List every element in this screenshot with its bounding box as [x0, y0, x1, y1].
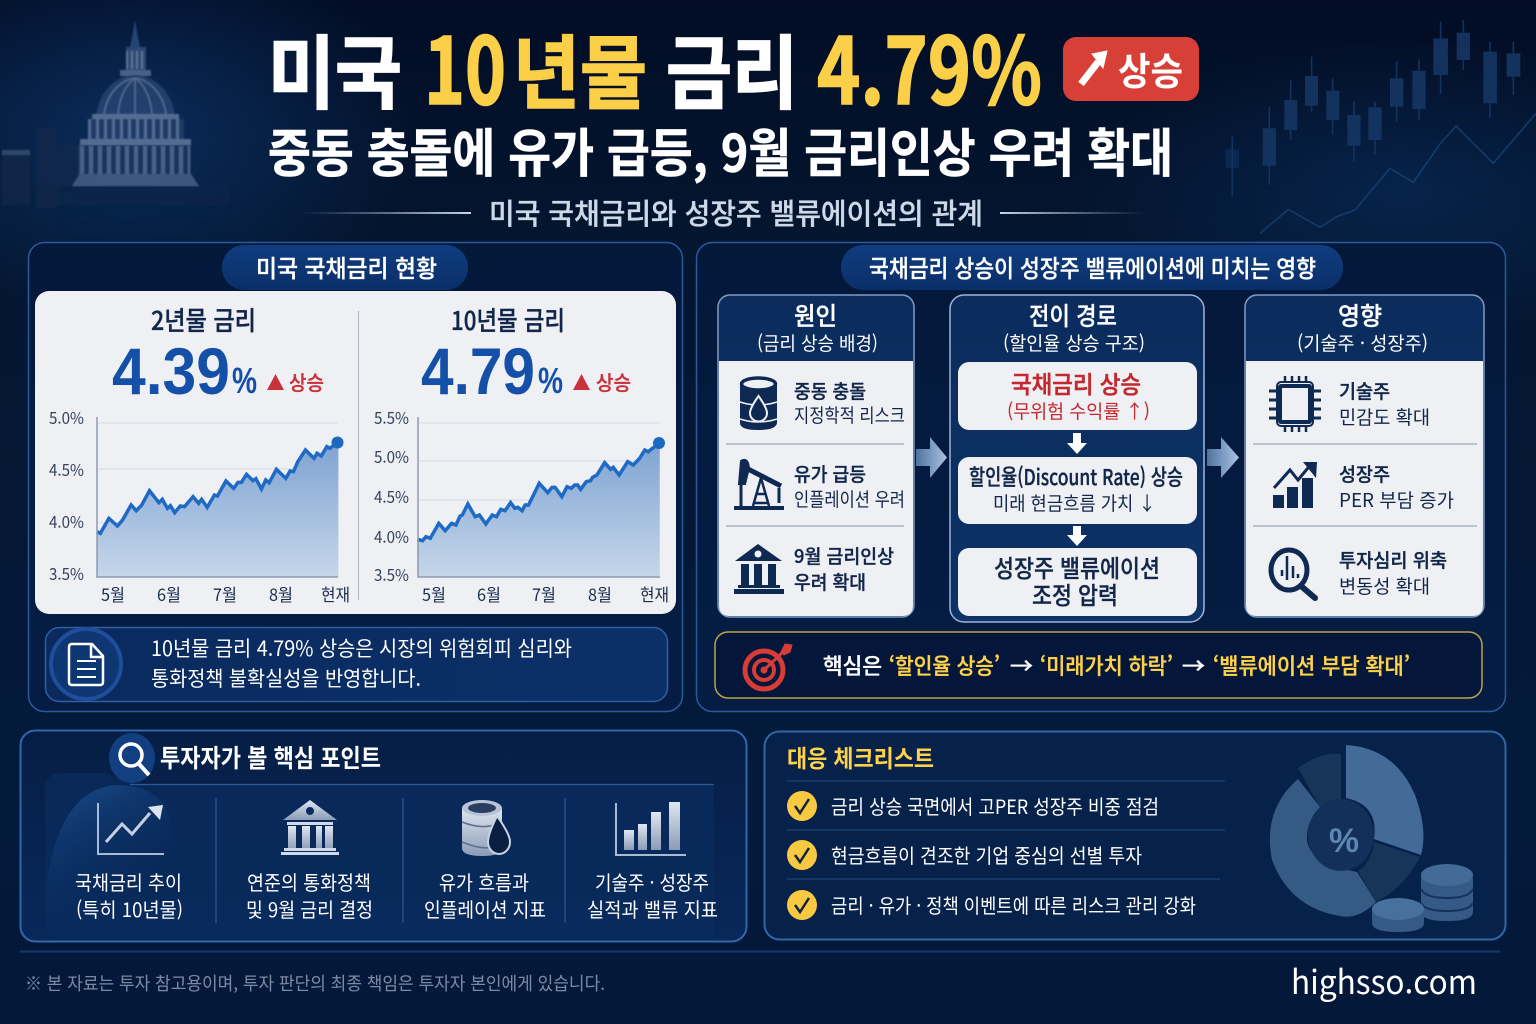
- arrow: down: [1067, 433, 1087, 454]
- checklist item 1: 금리 상승 국면에서 고PER 성장주 비중 점검: [831, 791, 1159, 820]
- icon: magnifier: [1271, 550, 1315, 598]
- chart: 2-year yield: 3.5%: [49, 561, 84, 585]
- box: discount rate: 할인율(Discount Rate) 상승: [969, 460, 1183, 492]
- column: impact: [1245, 295, 1484, 617]
- point: oil and inflation: [424, 800, 546, 923]
- chart: 2-year yield: 6월: [157, 581, 181, 606]
- panel: key points for investors: [20, 730, 746, 942]
- chart: 10-year yield: 5월: [422, 581, 446, 606]
- chart: 2-year yield: 2년물 금리: [151, 301, 256, 338]
- icon: oil barrel: [740, 378, 777, 430]
- chart: 2-year yield: 5월: [101, 581, 125, 606]
- point: tech and growth earnings: [587, 802, 718, 923]
- title: 10: [424, 0, 506, 131]
- box: valuation pressure: 조정 압력: [1032, 576, 1118, 611]
- chart: 2-year yield: 8월: [269, 581, 293, 606]
- box: valuation pressure: [958, 548, 1197, 616]
- column: impact: 민감도 확대: [1339, 403, 1430, 430]
- callout: 10-year note: [46, 628, 668, 702]
- chart: 2-year yield: 4.5%: [49, 457, 84, 481]
- column: causes: 유가 급등: [794, 460, 866, 487]
- callout: key takeaway: ‘밸류에이션 부담 확대’: [1213, 649, 1410, 681]
- box: yield rise: (무위험 수익률 ↑): [1007, 397, 1150, 424]
- point: yield trend: [75, 803, 183, 923]
- title: 년물: [513, 10, 647, 126]
- column: causes: 9월 금리인상: [794, 542, 894, 569]
- arrow: causes to path: [916, 437, 947, 478]
- point: tech and growth earnings: 실적과 밸류 지표: [587, 894, 718, 923]
- chart: 10-year yield: 8월: [588, 581, 612, 606]
- chart: 10-year yield: 상승: [596, 367, 631, 396]
- footer divider: [20, 950, 1500, 952]
- panel heading: [222, 245, 468, 290]
- icon: document: [69, 644, 103, 685]
- column: causes: 중동 충돌: [794, 377, 866, 404]
- callout: 10-year note: 통화정책 불확실성을 반영합니다.: [151, 663, 421, 693]
- panel: impact on growth stock valuation: [696, 242, 1506, 712]
- chart: 10-year yield: 3.5%: [374, 562, 409, 586]
- column: causes: 인플레이션 우려: [794, 485, 905, 512]
- box: yield rise: 국채금리 상승: [1011, 365, 1141, 400]
- point: yield trend: (특히 10년물): [76, 894, 183, 923]
- point: oil and inflation: 유가 흐름과: [439, 867, 529, 896]
- disclaimer: ※ 본 자료는 투자 참고용이며, 투자 판단의 최종 책임은 투자자 본인에게 있습니다.: [25, 970, 605, 996]
- yield card: [35, 291, 676, 614]
- section subtitle: 미국 국채금리와 성장주 밸류에이션의 관계: [489, 191, 983, 233]
- chart: 10-year yield: 현재: [640, 581, 669, 606]
- column: causes: 원인: [794, 297, 837, 333]
- chart: 2-year yield: 4.0%: [49, 509, 84, 533]
- panel heading: 미국 국채금리 현황: [256, 249, 437, 284]
- badge: rising: [1063, 37, 1199, 101]
- subtitle: 중동 충돌에 유가 급등, 9월 금리인상 우려 확대: [268, 112, 1173, 187]
- callout: key takeaway: →: [1182, 649, 1205, 681]
- column: impact: PER 부담 증가: [1339, 486, 1454, 513]
- arrow: down: [1067, 526, 1087, 546]
- icon: bank: [734, 544, 784, 594]
- chart: 10-year yield: [374, 301, 669, 606]
- column: impact: 영향: [1338, 297, 1382, 333]
- point: tech and growth earnings: 기술주 · 성장주: [595, 867, 709, 896]
- column: causes: [718, 295, 914, 617]
- panel: US treasury yield status: [28, 242, 682, 712]
- column: causes: 우려 확대: [794, 568, 866, 595]
- icon: capitol building: [2, 20, 230, 240]
- chart: 2-year yield: [49, 301, 350, 606]
- callout: key takeaway: [715, 632, 1482, 698]
- badge: rising: 상승: [1118, 41, 1183, 96]
- box: yield rise: [958, 362, 1197, 430]
- column: transmission path: 전이 경로: [1029, 297, 1117, 333]
- title: [268, 0, 1042, 131]
- chart: 2-year yield: 상승: [289, 367, 324, 396]
- column: transmission path: [950, 295, 1204, 622]
- chart decoration: faint candlesticks: [1226, 20, 1536, 233]
- chart: 10-year yield: 5.5%: [374, 405, 409, 429]
- callout: key takeaway: 핵심은: [823, 649, 882, 681]
- column: causes: 지정학적 리스크: [794, 401, 905, 428]
- chart: 10-year yield: 7월: [532, 581, 556, 606]
- panel: response checklist: [764, 732, 1506, 940]
- chart: 2-year yield: 4.39: [112, 334, 230, 408]
- column: impact: 변동성 확대: [1339, 572, 1430, 599]
- chart: 10-year yield: 4.5%: [374, 484, 409, 508]
- callout: key takeaway: →: [1010, 649, 1033, 681]
- heading: [109, 733, 381, 783]
- heading: 투자자가 볼 핵심 포인트: [160, 739, 381, 775]
- icon: growth chart: [1273, 462, 1317, 508]
- callout: key takeaway: ‘할인율 상승’: [889, 649, 1000, 681]
- point: yield trend: 국채금리 추이: [75, 867, 182, 896]
- checklist item 3: 금리 · 유가 · 정책 이벤트에 따른 리스크 관리 강화: [831, 890, 1196, 919]
- callout: 10-year note: 10년물 금리 4.79% 상승은 시장의 위험회피 심리와: [151, 633, 572, 663]
- checklist item 2: 현금흐름이 견조한 기업 중심의 선별 투자: [831, 840, 1142, 869]
- point: fed policy: 및 9월 금리 결정: [246, 894, 373, 923]
- box: discount rate: [958, 457, 1197, 524]
- point: fed policy: 연준의 통화정책: [247, 867, 371, 896]
- callout: key takeaway: ‘미래가치 하락’: [1040, 649, 1173, 681]
- chart: 10-year yield: 5.0%: [374, 444, 409, 468]
- chart: 2-year yield: %: [232, 360, 257, 401]
- column: impact: 성장주: [1339, 460, 1390, 487]
- chart: 10-year yield: 4.79: [421, 334, 535, 408]
- point: fed policy: [246, 800, 373, 923]
- chart: 10-year yield: 10년물 금리: [451, 301, 565, 338]
- box: discount rate: 미래 현금흐름 가치 ↓: [993, 489, 1156, 516]
- chart: 2-year yield: 5.0%: [49, 405, 84, 429]
- column: transmission path: (할인율 상승 구조): [1003, 329, 1145, 356]
- title: 미국: [268, 10, 402, 126]
- chart: 10-year yield: %: [538, 360, 563, 401]
- chart: donut with coins: [1270, 745, 1473, 932]
- icon: pumpjack: [734, 460, 784, 508]
- chart: donut with coins: %: [1329, 822, 1359, 860]
- column: impact: (기술주 · 성장주): [1297, 329, 1428, 356]
- chart: 2-year yield: 현재: [321, 581, 350, 606]
- website: highsso.com: [1291, 956, 1477, 1004]
- panel heading: 국채금리 상승이 성장주 밸류에이션에 미치는 영향: [869, 249, 1316, 284]
- title: 4.79%: [817, 0, 1042, 131]
- heading: 대응 체크리스트: [787, 739, 934, 774]
- box: valuation pressure: 성장주 밸류에이션: [994, 549, 1160, 584]
- chart: 2-year yield: 7월: [213, 581, 237, 606]
- column: causes: (금리 상승 배경): [757, 329, 878, 356]
- icon: target: [745, 644, 792, 689]
- chart: 10-year yield: 4.0%: [374, 524, 409, 548]
- column: impact: 투자심리 위축: [1339, 546, 1447, 573]
- title: 금리: [666, 10, 798, 126]
- column: impact: 기술주: [1339, 377, 1390, 404]
- icon: chip: [1269, 376, 1321, 432]
- point: oil and inflation: 인플레이션 지표: [424, 894, 546, 923]
- chart: 10-year yield: 6월: [477, 581, 501, 606]
- arrow: path to impact: [1207, 437, 1239, 478]
